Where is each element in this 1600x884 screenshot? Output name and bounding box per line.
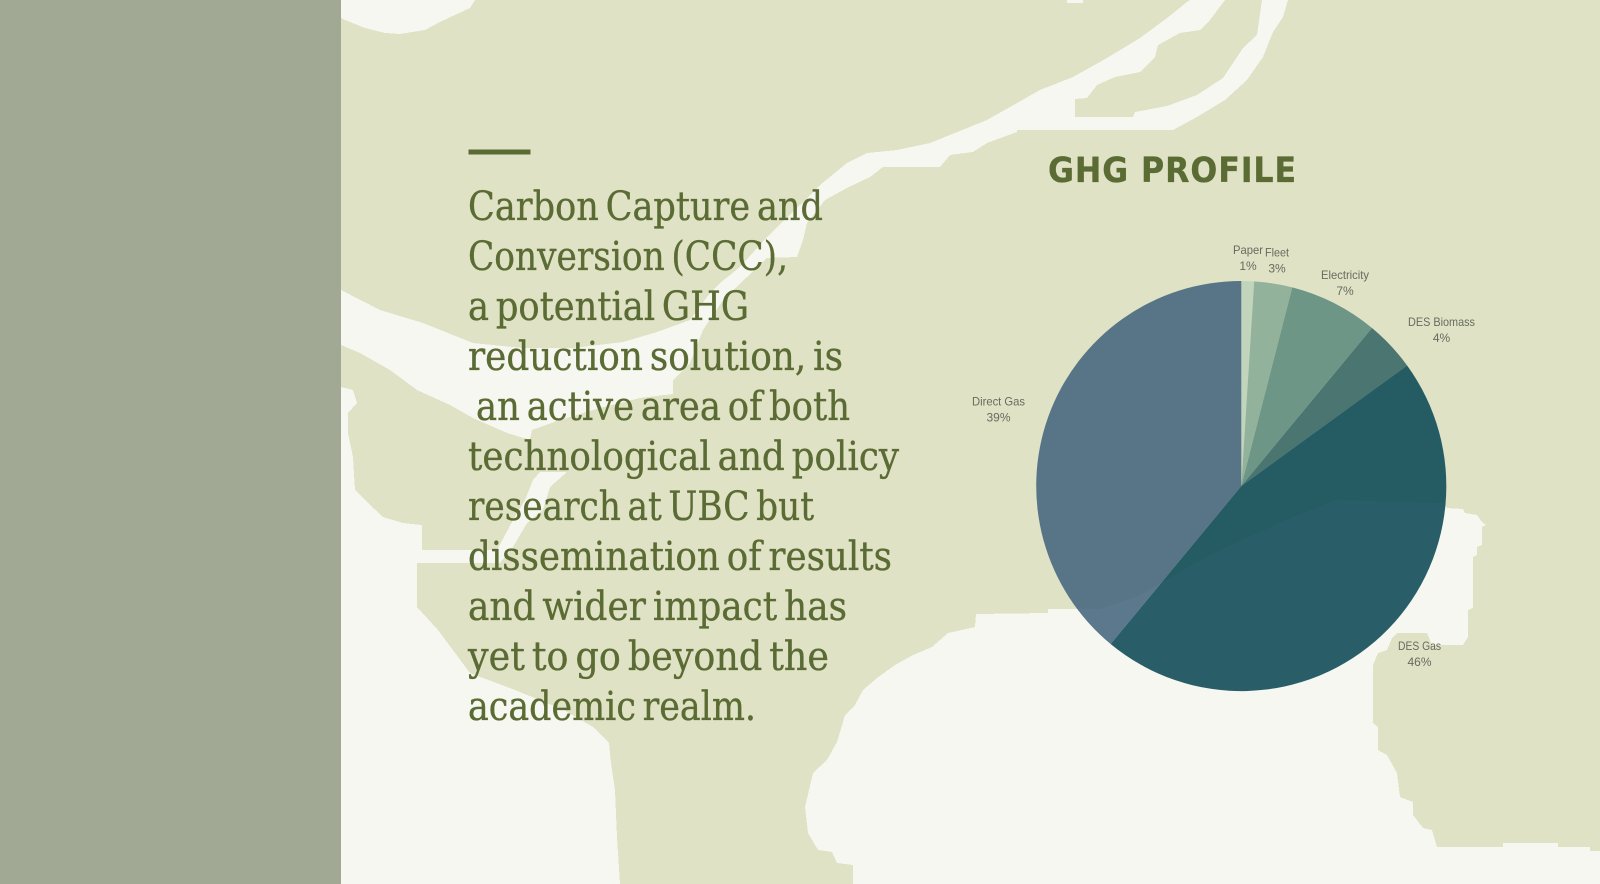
label: DES gas: 46% (1407, 655, 1432, 669)
slice: direct gas 39% (1036, 281, 1241, 644)
text block: carbon capture statement: dissemination of results (468, 534, 892, 580)
label: direct gas: Direct Gas (972, 394, 1025, 408)
label: fleet: Fleet (1265, 246, 1290, 260)
label: direct gas: 39% (986, 410, 1011, 424)
label: DES biomass: DES Biomass (1408, 315, 1475, 329)
label: DES biomass: 4% (1433, 331, 1451, 345)
text block: carbon capture statement: a potential GHG (468, 284, 749, 330)
heading: GHG profile: GHG PROFILE (1048, 151, 1297, 191)
text block: carbon capture statement: Carbon Capture and (468, 184, 823, 230)
accent bar (468, 150, 530, 154)
text block: carbon capture statement: Conversion (CCC), (468, 234, 788, 280)
label: direct gas (972, 394, 1025, 424)
label: fleet (1265, 246, 1290, 276)
text block: carbon capture statement (467, 184, 899, 730)
slice: DES biomass 4% (1241, 328, 1407, 486)
slice: paper 1% (1241, 281, 1254, 486)
text block: carbon capture statement: yet to go beyond the (467, 634, 829, 680)
text block: carbon capture statement: an active area of both (476, 384, 850, 430)
label: fleet: 3% (1268, 262, 1286, 276)
label: DES biomass (1408, 315, 1475, 345)
text block: carbon capture statement: reduction solution, is (468, 334, 843, 380)
label: DES gas: DES Gas (1398, 639, 1441, 653)
slice: electricity 7% (1241, 287, 1372, 486)
pie chart (1036, 281, 1446, 691)
label: paper (1233, 243, 1263, 273)
label: paper: Paper (1233, 243, 1263, 257)
text block: carbon capture statement: research at UBC but (468, 484, 814, 530)
text block: carbon capture statement: and wider impact has (468, 584, 847, 630)
panel: map background (341, 0, 1600, 884)
text block: carbon capture statement: academic realm. (468, 684, 756, 730)
slice: fleet 3% (1241, 281, 1292, 486)
label: electricity (1321, 268, 1369, 298)
label: electricity: Electricity (1321, 268, 1369, 282)
label: DES gas (1398, 639, 1441, 669)
label: paper: 1% (1239, 259, 1257, 273)
slice: DES gas 46% (1111, 366, 1446, 691)
label: electricity: 7% (1336, 284, 1354, 298)
text block: carbon capture statement: technological and policy (468, 434, 899, 480)
panel: left sidebar (0, 0, 341, 884)
